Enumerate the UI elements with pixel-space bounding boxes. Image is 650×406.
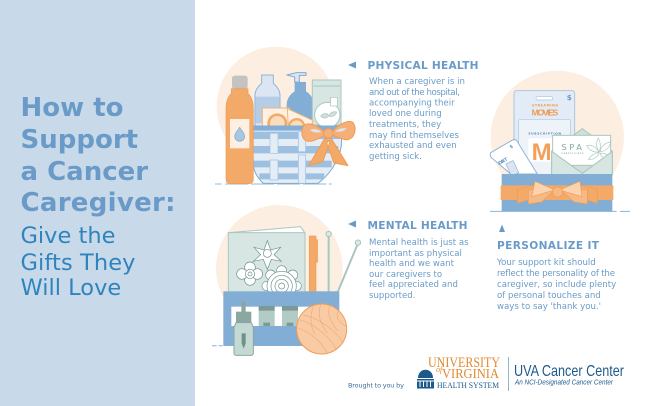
illustration: gift cards box (490, 71, 630, 211)
text block: physical health: accompanying their (369, 98, 455, 108)
text block: mental health: feel appreciated and (369, 280, 458, 290)
logo: University of Virginia Health System: UNIVERSITY (428, 355, 500, 371)
icon: blue gift box (502, 174, 612, 211)
text block: mental health: health and we want (369, 259, 455, 269)
icon: spa certificate envelope (552, 129, 612, 175)
icon: spa certificate envelope: CERTIFICATE (561, 153, 584, 155)
logo: University of Virginia Health System (417, 355, 500, 390)
text block: personalize it: ways to say 'thank you.' (497, 302, 601, 312)
icon: knitting needles (326, 231, 361, 307)
text block: personalize it (496, 258, 616, 312)
icon: streaming movies card: M (532, 139, 552, 166)
title: Caregiver: (20, 188, 176, 218)
arrow: personalize it (499, 224, 505, 232)
icon: streaming movies card: STREAMING (532, 104, 558, 108)
text block: personalize it: caregiver, so include plenty (497, 280, 616, 290)
icon: tea box (312, 80, 341, 128)
text block: mental health: supported. (369, 291, 415, 301)
icon: yarn ball (297, 304, 347, 354)
logo: UVA Cancer Center: UVA Cancer Center (514, 363, 625, 380)
text block: physical health: loved one during (369, 109, 442, 119)
icon: orange pen (309, 236, 318, 293)
text block: mental health: important as physical (369, 249, 462, 259)
title: How to (20, 93, 123, 123)
icon: diet card (490, 140, 537, 176)
text block: mental health (369, 238, 469, 301)
illustration: craft kit (212, 205, 361, 355)
icon: orange bow (302, 121, 355, 166)
panel: title sidebar (0, 0, 195, 406)
heading: physical health: PHYSICAL HEALTH (368, 60, 478, 72)
title (20, 93, 176, 218)
text block: physical health: When a caregiver is in (369, 77, 465, 87)
icon: spa certificate envelope: SPA (561, 142, 582, 152)
arrow: mental health (348, 220, 356, 228)
illustration: wellness gift basket (215, 47, 355, 184)
logo: University of Virginia Health System: of (436, 365, 444, 374)
subtitle: Will Love (20, 275, 121, 301)
credit line: Brought to you by (348, 382, 404, 390)
icon: streaming movies card: MOVIES (532, 108, 559, 118)
icon: diet card: $ (509, 144, 514, 150)
logo: University of Virginia Health System: VIRGINIA (442, 367, 500, 382)
subtitle (20, 223, 136, 301)
icon: woven basket (253, 126, 342, 183)
text block: personalize it: Your support kit should (496, 258, 596, 268)
icon: streaming movies card (514, 91, 575, 177)
divider (508, 357, 509, 391)
title: a Cancer (20, 157, 148, 187)
icon: citrus soap cards (262, 108, 313, 135)
icon: rotunda (417, 370, 434, 388)
text block: personalize it: reflect the personality of the (497, 269, 615, 279)
icon: dropper bottle (234, 301, 253, 355)
logo: University of Virginia Health System: HEALTH SYSTEM (437, 380, 499, 390)
heading: mental health: MENTAL HEALTH (368, 220, 468, 232)
icon: coloring book (228, 227, 305, 301)
icon: orange ribbon and bow (501, 181, 613, 204)
text block: physical health: treatments, they (369, 120, 441, 130)
icon: pump bottle (287, 73, 314, 125)
text block: mental health: our caregivers to (369, 270, 442, 280)
icon: blue storage box (223, 291, 339, 346)
icon: diet card: DIET (497, 156, 510, 167)
heading: personalize it: PERSONALIZE IT (497, 240, 600, 252)
icon: water bottle (255, 75, 280, 127)
icon: streaming movies card: SUBSCRIPTION (528, 131, 561, 135)
icon: orange bottle (226, 76, 253, 184)
arrow: physical health (348, 62, 356, 68)
subtitle: Gifts They (20, 250, 136, 276)
logo: UVA Cancer Center (514, 363, 625, 386)
subtitle: Give the (20, 223, 115, 249)
text block: physical health: getting sick. (369, 152, 422, 162)
text block: physical health: may find themselves (369, 131, 460, 141)
text block: physical health: and out of the hospital, (369, 88, 460, 98)
icon: streaming movies card: $ (567, 93, 572, 102)
text block: mental health: Mental health is just as (369, 238, 469, 248)
text block: physical health (369, 77, 465, 162)
text block: personalize it: of personal touches and (497, 291, 601, 301)
text block: physical health: exhausted and even (369, 141, 457, 151)
title: Support (20, 125, 138, 155)
logo: UVA Cancer Center: An NCI-Designated Cancer Center (514, 380, 614, 386)
